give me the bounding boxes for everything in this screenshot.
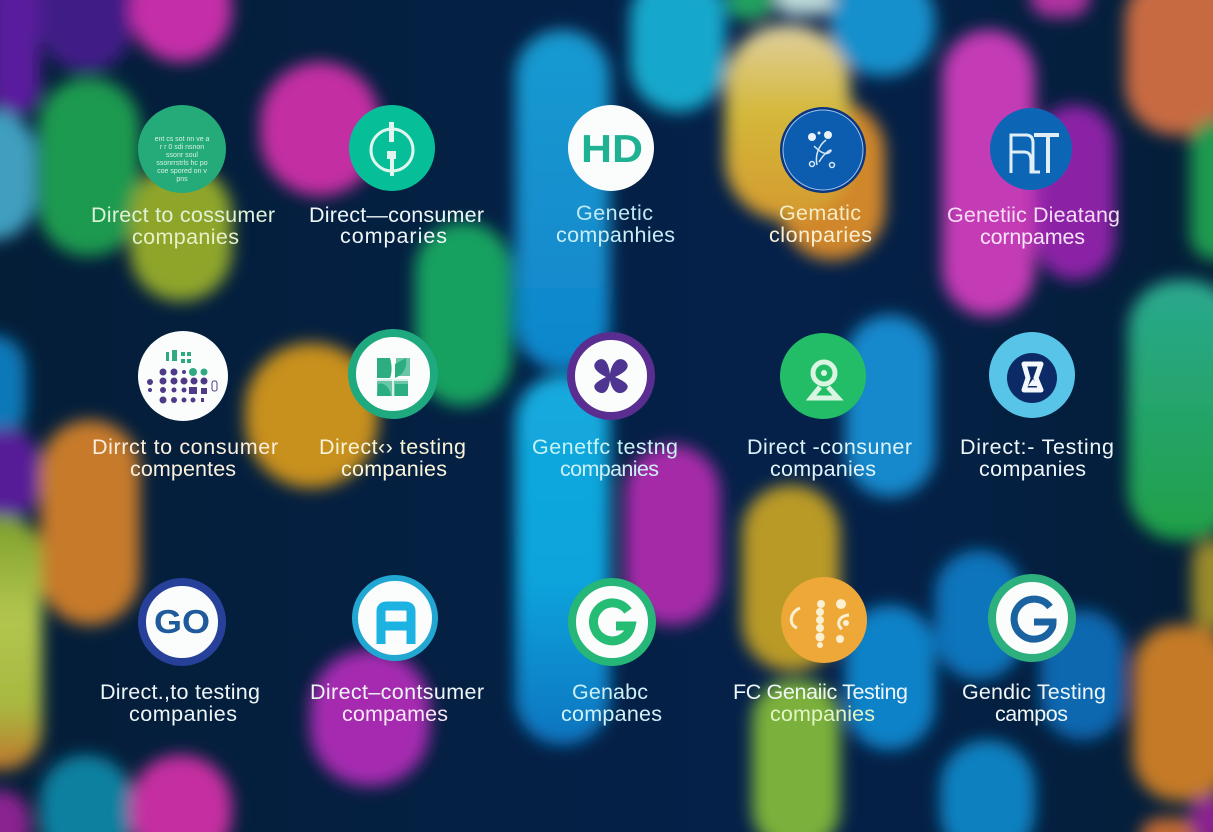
tile: row 2 column 4 xyxy=(747,333,912,481)
label: companies xyxy=(129,702,237,726)
tile: row 2 column 1 xyxy=(92,331,278,481)
label: Direct‹› testing xyxy=(319,435,466,459)
tile: row 3 column 4 xyxy=(733,577,908,726)
label xyxy=(769,201,872,247)
icon: orange dotted symbol xyxy=(781,577,867,663)
tile: row 3 column 5 xyxy=(962,578,1106,726)
label: Genetiic Dieatang xyxy=(947,203,1120,227)
icon: GO logo xyxy=(142,582,222,662)
label: clonparies xyxy=(769,223,872,247)
label xyxy=(309,203,484,248)
label xyxy=(532,435,678,481)
label: Direct—consumer xyxy=(309,203,484,227)
label xyxy=(733,680,908,726)
icon: text badge: ssonr soul xyxy=(166,152,198,159)
tile: row 2 column 3 xyxy=(532,336,678,481)
icon: green target figure xyxy=(780,333,866,419)
label: Gendic Testing xyxy=(962,680,1106,704)
label: Genabc xyxy=(572,680,648,704)
tile: row 2 column 2 xyxy=(319,333,466,481)
label: Direct:- Testing xyxy=(960,435,1114,459)
icon: HD logo xyxy=(568,105,654,191)
label: compames xyxy=(342,702,448,726)
label: Direct.,to testing xyxy=(100,680,260,704)
icon: GO logo: GO xyxy=(154,603,210,640)
tile: row 1 column 4 xyxy=(769,107,872,247)
tile: row 1 column 2 xyxy=(309,105,484,248)
tile: row 2 column 5 xyxy=(960,332,1114,481)
icon: text badge: ssonrrstrls hc po xyxy=(156,160,208,167)
icon: ring with stem xyxy=(349,105,435,191)
label xyxy=(92,435,278,481)
icon: G logo xyxy=(992,578,1072,658)
icon: text badge: r r 0 sdi nsnon xyxy=(160,144,204,151)
label: campos xyxy=(995,702,1068,726)
label: companies xyxy=(560,457,659,481)
label xyxy=(310,680,484,726)
label: companies xyxy=(132,225,239,249)
label xyxy=(747,435,912,481)
label: Direct to cossumer xyxy=(91,203,275,227)
label: companies xyxy=(770,702,875,726)
label: Genetfc testng xyxy=(532,435,678,459)
label: Direct -consuner xyxy=(747,435,912,459)
tile: row 3 column 1 xyxy=(100,582,260,726)
icon: hourglass badge xyxy=(989,332,1075,418)
label xyxy=(962,680,1106,726)
label: companhies xyxy=(556,223,675,247)
label: FC Genaiic Testing xyxy=(733,680,908,704)
icon: text badge: pns xyxy=(176,176,188,183)
icon: leaf block xyxy=(352,333,434,415)
label: companies xyxy=(341,457,447,481)
tile: row 3 column 2 xyxy=(310,578,484,726)
label xyxy=(556,201,675,247)
tile: row 1 column 3 xyxy=(556,105,675,247)
label: compentes xyxy=(130,457,236,481)
icon: text badge xyxy=(138,105,226,193)
tile: row 1 column 5 xyxy=(947,108,1120,249)
label: cornpames xyxy=(980,225,1085,249)
label: companies xyxy=(770,457,876,481)
label xyxy=(319,435,466,481)
icon: HD logo: HD xyxy=(581,128,643,171)
icon: dot matrix xyxy=(138,331,228,421)
label: Dirrct to consumer xyxy=(92,435,278,459)
label xyxy=(100,680,260,726)
icon: text badge: coe spored on v xyxy=(157,168,207,175)
label: Direct–contsumer xyxy=(310,680,484,704)
label xyxy=(947,203,1120,249)
label: Gematic xyxy=(779,201,861,225)
label xyxy=(91,203,275,249)
label: companies xyxy=(979,457,1086,481)
label: companes xyxy=(561,702,662,726)
label: Genetic xyxy=(576,201,653,225)
tile: row 1 column 1 xyxy=(91,105,275,249)
icon: text badge: ent cs sot nn ve a xyxy=(155,136,210,143)
label xyxy=(960,435,1114,481)
tile: row 3 column 3 xyxy=(561,582,662,726)
icon: chromosome xyxy=(571,336,651,416)
icon: G ring logo xyxy=(572,582,652,662)
icon: helix diagram xyxy=(780,107,866,193)
label xyxy=(561,680,662,726)
label: comparies xyxy=(340,224,447,248)
icon: R logo xyxy=(355,578,435,658)
icon: FT logo xyxy=(990,108,1072,190)
